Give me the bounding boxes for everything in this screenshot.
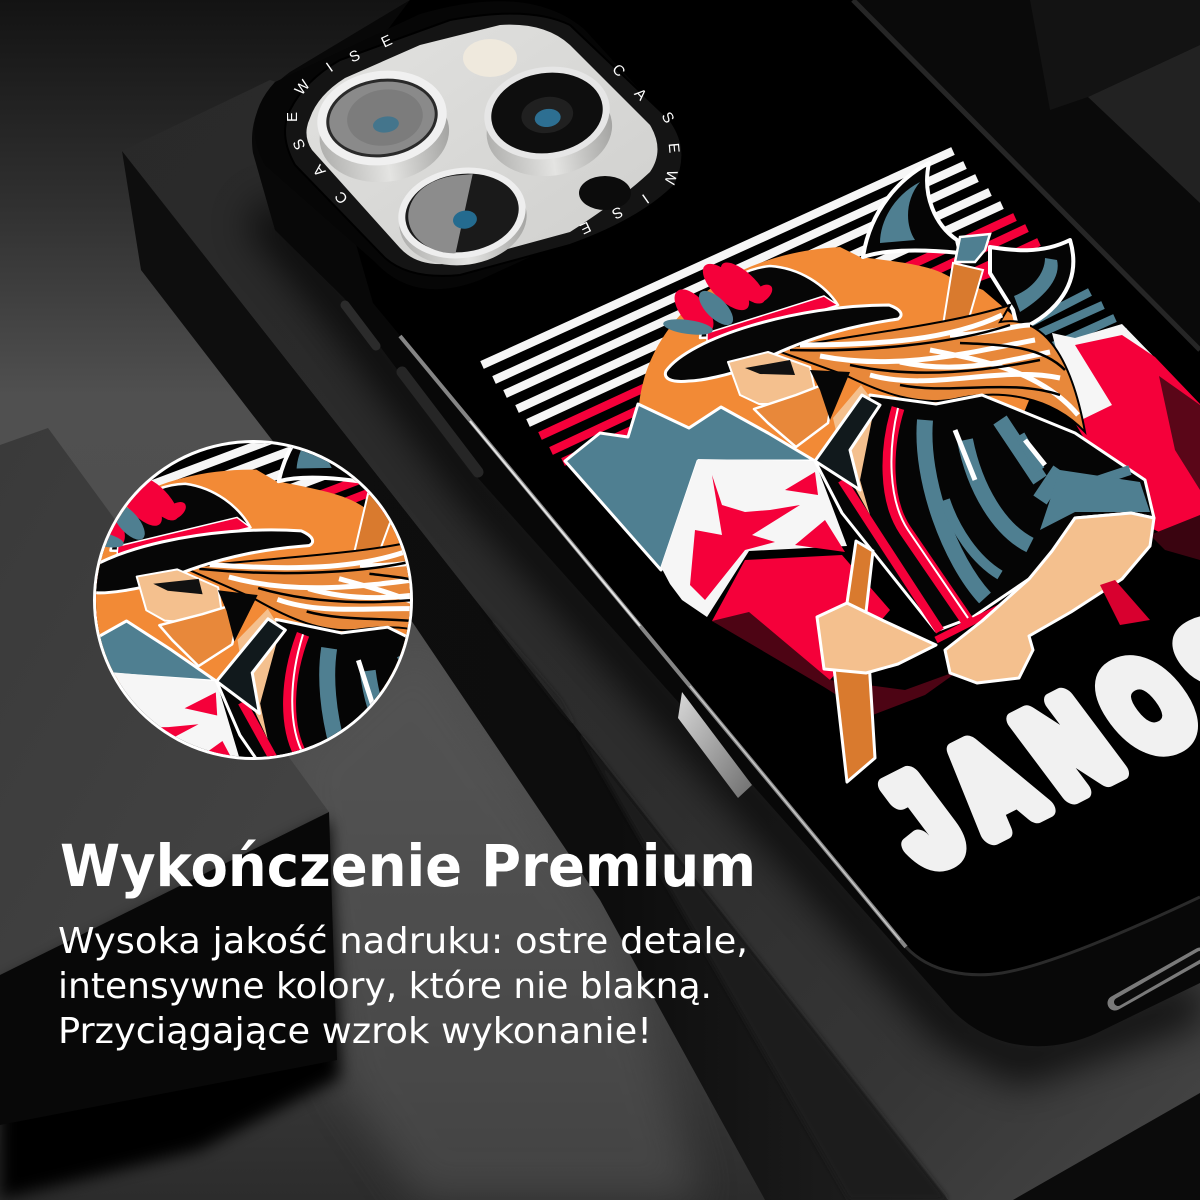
phone case body (252, 0, 1200, 1046)
white fold marks (955, 430, 1045, 480)
axe head (955, 234, 990, 262)
flash (463, 39, 517, 77)
suspenders (842, 408, 1035, 640)
CASEWISE ring text: S (609, 203, 625, 222)
camera island (255, 1, 683, 289)
phone back surface (320, 0, 1200, 975)
CASEWISE ring text: C (608, 61, 628, 81)
side button silver (678, 692, 752, 798)
description text: Przyciągające wzrok wykonanie! (58, 1011, 652, 1052)
face (728, 352, 815, 404)
background: lower-left block side shadow (0, 820, 340, 1200)
axe right blade (990, 240, 1073, 330)
phone edge highlight (400, 336, 1200, 975)
background: lower-left block top (0, 428, 329, 975)
CASEWISE ring text: I (323, 59, 336, 76)
red peak small (785, 472, 818, 495)
forest right (1159, 376, 1200, 490)
side slot upper (345, 305, 376, 346)
shirt (815, 395, 1154, 631)
artwork on phone back (482, 151, 1200, 890)
lens bottom (392, 160, 533, 273)
red mountain lower (712, 555, 890, 680)
eye shadow (745, 360, 795, 375)
CASEWISE ring text: C (331, 188, 352, 207)
lens left (311, 62, 455, 190)
arm (945, 513, 1154, 683)
lens plate (306, 25, 658, 264)
axe left blade (863, 163, 960, 257)
CASEWISE ring text: E (665, 142, 682, 154)
background: plinth side lit strip (475, 600, 948, 1200)
hat (665, 266, 901, 381)
beard (754, 380, 835, 447)
bumper ring band (285, 14, 682, 276)
background: top-right block (1088, 45, 1200, 203)
charging port (1115, 955, 1200, 1003)
orange sun (638, 247, 1050, 470)
collar (815, 395, 880, 490)
side hair dark (810, 370, 850, 420)
CASEWISE ring text: A (631, 85, 650, 104)
forest bottom (712, 612, 960, 716)
side button long (402, 372, 478, 472)
lower axe handle (833, 541, 875, 782)
red peak mid (795, 520, 845, 552)
axe right blade colour (1014, 258, 1058, 312)
lens right (478, 59, 618, 184)
blue mountain (565, 404, 815, 570)
neck (833, 385, 875, 515)
axe upper handle (943, 263, 983, 325)
CASEWISE ring text: E (284, 112, 301, 122)
detail magnifier circle (93, 440, 413, 760)
title: Wykończenie Premium (60, 832, 756, 900)
white mountain right (1052, 324, 1159, 423)
white snow block (661, 459, 847, 617)
red mountain right (1075, 335, 1200, 550)
CASEWISE ring text: E (379, 32, 395, 51)
CASEWISE ring text: I (639, 190, 652, 207)
description text: Wysoka jakość nadruku: ostre detale, (58, 921, 748, 962)
phone top-right edge (853, 0, 1200, 350)
background: top-right dark area (853, 0, 1200, 360)
CASEWISE ring text: W (292, 76, 314, 99)
CASEWISE ring text: A (310, 161, 329, 180)
background: top-right panel (1030, 0, 1200, 110)
hair (775, 305, 1085, 432)
background: main plinth side (122, 151, 948, 1200)
axe left blade colour (880, 182, 920, 243)
description text: intensywne kolory, które nie blakną. (58, 966, 712, 1007)
forest right lower (1150, 515, 1200, 560)
red peaks on snow (690, 475, 800, 600)
microphone hole (579, 176, 631, 210)
hand (817, 603, 936, 673)
shirt sleeve (1040, 470, 1150, 530)
phone cast shadow (262, 210, 1200, 1062)
background: lit floor patch (290, 640, 700, 1200)
background: bottom-right dark corner (1013, 1093, 1200, 1200)
hat feathers (662, 256, 776, 339)
CASEWISE ring text: S (290, 136, 309, 152)
CASEWISE ring text: E (577, 218, 593, 237)
shirt blue panels (924, 420, 1060, 598)
CASEWISE ring text: W (660, 168, 681, 187)
red shirt tail (1100, 580, 1150, 625)
camera bumper outer (255, 1, 683, 289)
CASEWISE ring text: S (658, 109, 677, 126)
CASEWISE ring text (284, 32, 682, 237)
CASEWISE ring text: S (347, 47, 363, 66)
description text (58, 921, 748, 1052)
stripes (482, 151, 1128, 462)
background: lower-left block side (0, 812, 337, 1125)
axe (863, 163, 1073, 330)
